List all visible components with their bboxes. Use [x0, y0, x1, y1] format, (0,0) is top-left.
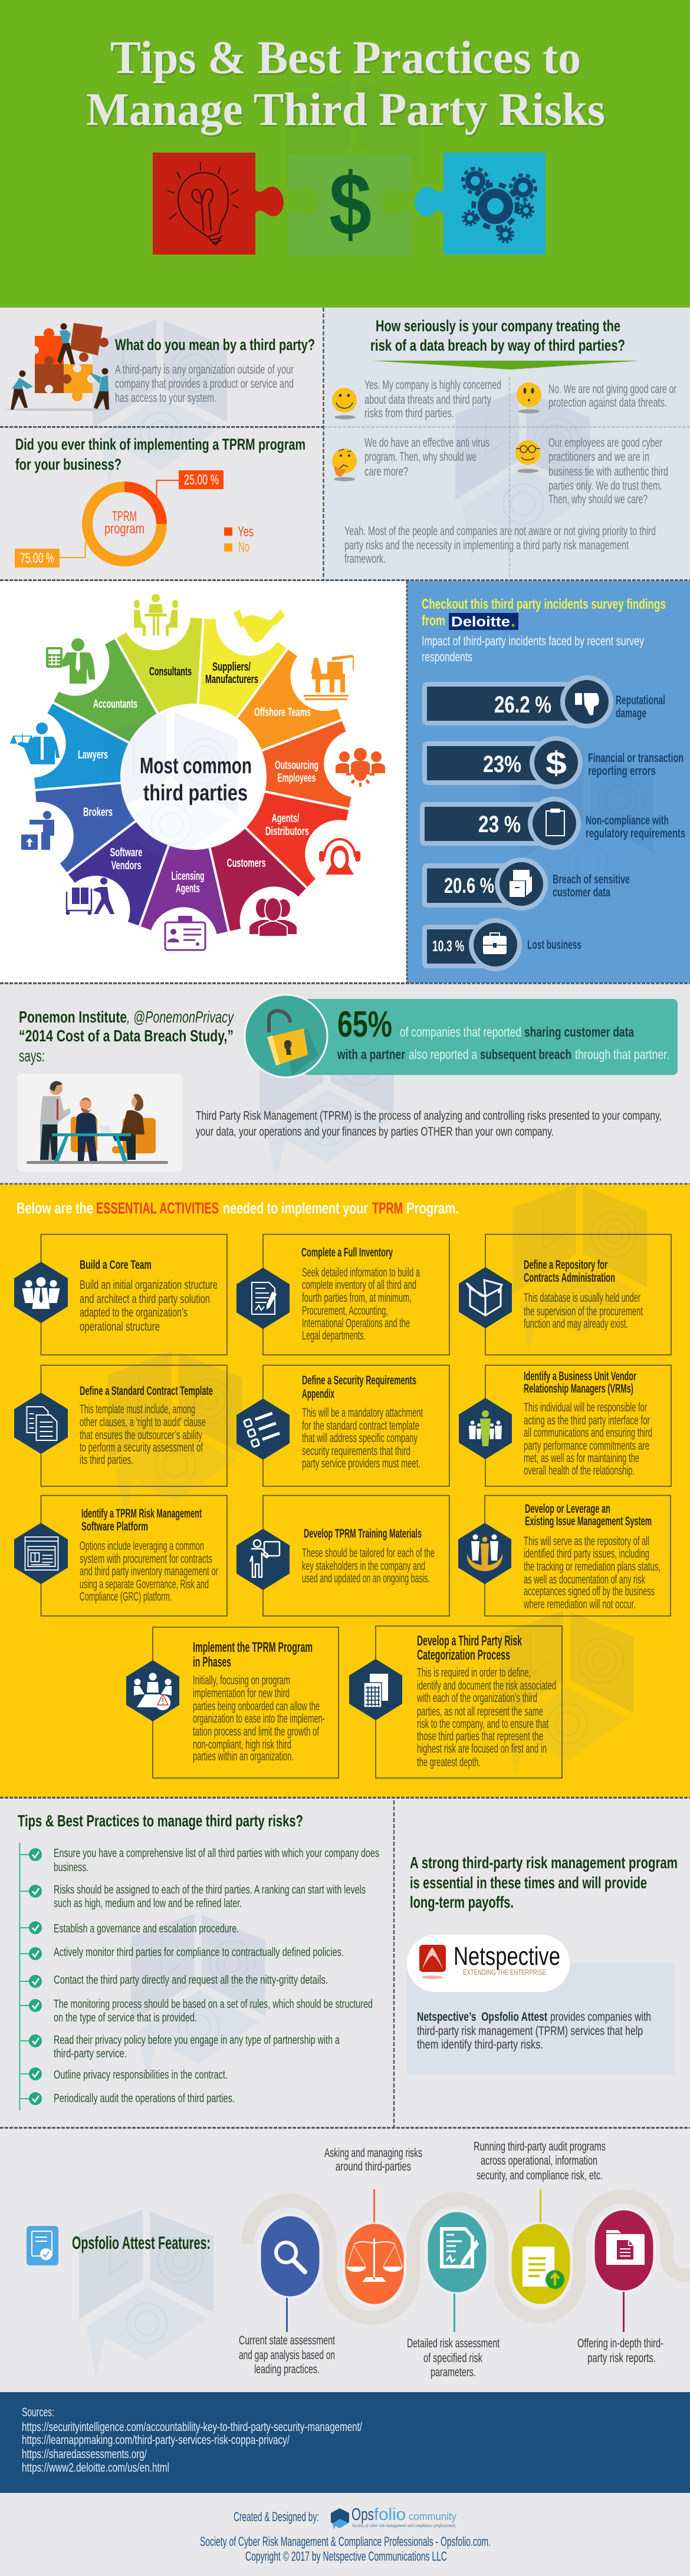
- icon: document upload: [523, 2247, 564, 2289]
- title: Manage Third Party Risks: [86, 84, 605, 136]
- logo: Netspective: EXTENDING THE ENTERPRISE: [463, 1968, 546, 1977]
- card: develop a third party risk categorization process: parties, as not all represent the same: [417, 1705, 543, 1719]
- segment labels: Outsourcing: [275, 759, 318, 772]
- icon: open box: [466, 1280, 502, 1315]
- card: define a security requirements appendix: [236, 1365, 449, 1486]
- text block: running audit programs: across operational, information: [481, 2154, 597, 2168]
- text block: asking and managing: Asking and managing risks: [324, 2146, 422, 2160]
- segment labels: Software: [110, 846, 143, 859]
- card: identify a TPRM risk management platform: Identify a TPRM Risk Management: [81, 1507, 202, 1520]
- illustration: business meeting: [17, 1074, 183, 1172]
- heading: strong program statement: long-term payoffs.: [410, 1893, 514, 1911]
- panel: sources: https://securityintelligence.com/accountability-key-to-third-party-security-management/: [22, 2420, 362, 2434]
- text block: yeah summary: framework.: [344, 552, 386, 566]
- icon: contract documents: [27, 1407, 57, 1440]
- text block: Ponemon citation: , @PonemonPrivacy: [127, 1008, 234, 1026]
- icon: meeting with warning: [134, 1673, 172, 1710]
- icon: core team: [22, 1277, 60, 1309]
- stat bar: customer data breach 20.6%: Breach of sensitive: [553, 873, 630, 886]
- text block: antivirus answer: We do have an effective anti virus: [364, 436, 489, 450]
- segment labels: Agents/: [271, 812, 300, 825]
- panel: third party definitions left: [0, 306, 690, 580]
- text block: tips list: Ensure you have a comprehensive list of all third parties with which your company does: [54, 1847, 379, 1860]
- card: define a security requirements appendix: for the standard contract template: [302, 1419, 419, 1433]
- stat bar: customer data breach 20.6%: customer data: [553, 886, 610, 899]
- callout: 65 percent: subsequent breach: [480, 1047, 571, 1062]
- card: build a core team: Build a Core Team: [80, 1258, 152, 1272]
- icon: smile face: [332, 388, 357, 420]
- icon: customers silhouettes: [249, 898, 297, 936]
- stat bar: reputational damage 26.2%: [422, 675, 665, 728]
- card: develop TPRM training materials: key stakeholders in the company and: [302, 1559, 425, 1573]
- text block: tips list: such as high, medium and low and be refined later.: [54, 1897, 242, 1910]
- panel: most common third parties wheel: [0, 581, 407, 983]
- donut chart: TPRM program: program: [104, 521, 144, 537]
- icon: magnifier: [276, 2242, 305, 2272]
- text block: yes answer: risks from third parties.: [364, 407, 454, 420]
- card: implement the TPRM program in phases: tation process and limit the growth of: [193, 1725, 319, 1739]
- chart legend: No: [238, 539, 249, 555]
- card: build a core team: operational structure: [80, 1320, 160, 1334]
- heading: strong program statement: [410, 1853, 678, 1911]
- title: Manage Third Party Risks: [87, 86, 606, 137]
- card: complete a full inventory: Complete a Full Inventory: [301, 1246, 393, 1259]
- text block: employees answer: [548, 436, 668, 506]
- text block: tips list: Establish a governance and escalation procedure.: [54, 1922, 239, 1935]
- icon: green puzzle piece with dollar sign: $: [329, 154, 372, 253]
- stat bar: non-compliance 23%: 23 %: [478, 812, 521, 837]
- panel: sources: https://sharedassessments.org/: [22, 2448, 147, 2461]
- logo: Netspective: [419, 1942, 560, 1979]
- text block: impact subtitle: respondents: [422, 649, 472, 664]
- icon: call agent: [319, 839, 360, 875]
- text block: offering reports: [577, 2337, 663, 2365]
- center label: third parties: [143, 781, 248, 806]
- text block: yeah summary: [344, 525, 656, 566]
- card: identify a TPRM risk management platform: and third party inventory management or: [80, 1565, 218, 1578]
- callout: 65 percent: also reported a: [409, 1047, 477, 1062]
- callout: Netspective: them identify third-party risks.: [417, 2038, 543, 2051]
- card: develop a third party risk categorization process: This is required in order to define,: [417, 1666, 531, 1680]
- card: define a security requirements appendix: security requirements that third: [302, 1444, 410, 1458]
- card: define a standard contract template: This template must include, among: [80, 1403, 195, 1416]
- card: implement the TPRM program in phases: parties being onboarded can allow the: [193, 1700, 320, 1713]
- stat bar: lost business 10.3%: 10.3 %: [432, 937, 464, 955]
- stat bar: customer data breach 20.6%: [422, 857, 630, 911]
- title: Tips & Best Practices to: [111, 34, 582, 85]
- center label: [140, 754, 252, 806]
- icon: outsourcing employees globe: [336, 748, 385, 787]
- card: develop a third party risk categorization process: identify and document the risk associated: [417, 1679, 556, 1693]
- segment labels: Brokers: [83, 806, 113, 819]
- callout: 65 percent: sharing customer data: [524, 1024, 634, 1040]
- text block: impact subtitle: [422, 634, 644, 664]
- text block: antivirus answer: program. Then, why should we: [364, 450, 477, 464]
- card: identify a TPRM risk management platform: Options include leveraging a common: [80, 1539, 204, 1553]
- heading: survey findings: [422, 596, 666, 630]
- card: define a security requirements appendix: that will address specific company: [302, 1432, 418, 1445]
- card: implement the TPRM program in phases: [126, 1627, 339, 1778]
- icon: offshore rig: [304, 655, 353, 700]
- segment labels: Suppliers/: [212, 661, 251, 674]
- card: define a repository: Define a Repository for: [524, 1258, 607, 1272]
- text block: tips list: on the type of service that is provided.: [54, 2011, 197, 2024]
- icon: certificate: [27, 2226, 58, 2265]
- segment labels: Vendors: [111, 859, 142, 872]
- icon: green puzzle piece with dollar sign: [288, 154, 412, 256]
- segment labels: Manufacturers: [205, 673, 258, 686]
- card: define a repository: Contracts Administration: [524, 1271, 615, 1285]
- logo: Opsfolio community: Ops: [351, 2505, 374, 2524]
- card: identify a business unit vendor: [459, 1365, 671, 1486]
- card: develop or leverage issue management: Develop or Leverage an: [525, 1502, 610, 1516]
- segment labels: Employees: [277, 772, 316, 785]
- card: define a security requirements appendix: Define a Security Requirements: [302, 1374, 416, 1387]
- heading: survey findings: from: [422, 613, 445, 629]
- icon: thumbs down: [575, 693, 599, 715]
- illustration: people assembling puzzle: [5, 323, 113, 411]
- card: define a repository: [459, 1234, 671, 1355]
- card: implement the TPRM program in phases: Implement the TPRM Program: [193, 1640, 313, 1655]
- panel: footer credits: Created & Designed by:: [234, 2509, 319, 2524]
- timeline: check markers: [19, 1843, 42, 2110]
- card: develop a third party risk categorization process: Develop a Third Party Risk: [417, 1633, 522, 1649]
- card: develop TPRM training materials: used and updated on an ongoing basis.: [302, 1572, 430, 1585]
- text block: third party definition: has access to your system.: [115, 391, 216, 405]
- heading: essential activities: TPRM: [372, 1199, 403, 1217]
- card: develop a third party risk categorization process: Categorization Process: [417, 1647, 510, 1663]
- panel: essential activities: [0, 1185, 690, 1797]
- donut chart: TPRM program: 25.00 %: [184, 472, 219, 488]
- icon: clipboard: [546, 809, 564, 836]
- segment labels: Distributors: [265, 825, 309, 838]
- text block: TPRM definition: your data, your operations and your finances by parties OTHER than your own company.: [196, 1125, 554, 1139]
- callout: 65 percent: of companies that reported: [400, 1024, 521, 1040]
- chart legend: [224, 524, 254, 555]
- icon: vendor team: [469, 1410, 502, 1446]
- card: define a security requirements appendix: party service providers must meet.: [302, 1457, 420, 1470]
- card: identify a TPRM risk management platform: system with procurement for contracts: [80, 1552, 212, 1566]
- card: define a security requirements appendix: This will be a mandatory attachment: [302, 1406, 423, 1420]
- text block: detailed risk assessment: [407, 2337, 500, 2379]
- card: identify a TPRM risk management platform: Software Platform: [81, 1520, 148, 1533]
- text block: tips list: The monitoring process should be based on a set of rules, which should be structured: [54, 1998, 373, 2011]
- card: implement the TPRM program in phases: parties within an organization.: [193, 1750, 294, 1763]
- text block: third party definition: [115, 363, 294, 405]
- chart: serpentine features path: [248, 2189, 690, 2332]
- icon: signed report: [440, 2227, 479, 2268]
- text block: Ponemon citation: “2014 Cost of a Data Breach Study,”: [19, 1027, 234, 1045]
- text block: yes answer: [364, 378, 501, 420]
- card: implement the TPRM program in phases: implementation for new third: [193, 1687, 290, 1700]
- wheel segments: [30, 614, 360, 943]
- heading: TPRM program question: for your business?: [15, 456, 121, 473]
- card: complete a full inventory: complete inventory of all third and: [302, 1278, 416, 1292]
- panel: Ponemon Institute statistic: [0, 984, 690, 1184]
- card: complete a full inventory: fourth parties from, at minimum,: [302, 1291, 412, 1305]
- donut chart: TPRM program: 75.00 %: [20, 550, 54, 566]
- stat bar: reputational damage 26.2%: Reputational: [616, 694, 665, 707]
- card: develop a third party risk categorization process: risk to the company, and to ensure that: [417, 1717, 548, 1731]
- card: develop a third party risk categorization process: highest risk are focused on first and in: [417, 1742, 547, 1756]
- panel: footer credits: Copyright © 2017 by Netspective Communications LLC: [245, 2549, 447, 2564]
- card: define a standard contract template: Define a Standard Contract Template: [80, 1384, 213, 1398]
- icon: trainer at board: [250, 1540, 280, 1577]
- icon: issue team: [467, 1535, 502, 1571]
- card: develop a third party risk categorization process: with each of the organization’s third: [416, 1691, 537, 1705]
- center label: Most common: [140, 754, 252, 779]
- heading: survey findings: Deloitte: [451, 614, 510, 630]
- icon: red puzzle piece with light bulb: [153, 153, 284, 255]
- heading: essential activities: needed to implement your: [223, 1199, 368, 1217]
- panel: tips and best practices: [0, 1799, 690, 2128]
- card: complete a full inventory: [236, 1234, 449, 1355]
- text block: running audit programs: Running third-party audit programs: [474, 2140, 606, 2153]
- segment labels: Accountants: [93, 698, 137, 711]
- text block: running audit programs: security, and compliance risk, etc.: [477, 2169, 603, 2182]
- card: define a standard contract template: to perform a security assessment of: [80, 1441, 203, 1454]
- text block: no answer: [548, 382, 676, 410]
- card: define a standard contract template: that ensures the outsourcer’s ability: [80, 1429, 202, 1442]
- icon: lawyer with scales: [11, 723, 60, 764]
- text block: detailed risk assessment: Detailed risk assessment: [407, 2337, 500, 2350]
- text block: current state assessment: Current state assessment: [239, 2334, 335, 2347]
- icon: consultants meeting: [134, 594, 178, 636]
- text block: tips list: Contact the third party directly and request all the the nitty-gritty details.: [54, 1974, 328, 1987]
- logo: Netspective: Netspective: [454, 1942, 560, 1971]
- text block: Ponemon citation: says:: [19, 1047, 45, 1065]
- panel: Opsfolio Attest features: [0, 2129, 690, 2392]
- chart legend: Yes: [238, 524, 254, 540]
- icon: risk reward scales: [346, 2238, 403, 2282]
- card: complete a full inventory: Legal departments.: [302, 1329, 366, 1343]
- card: identify a TPRM risk management platform: Compliance (GRC) platform.: [80, 1590, 172, 1604]
- callout: 65 percent: 65%: [337, 1004, 392, 1045]
- text block: running audit programs: [474, 2140, 606, 2182]
- callout: Netspective: provides companies with: [550, 2010, 651, 2024]
- text block: current state assessment: leading practices.: [254, 2363, 320, 2376]
- icon: licensing badge: [165, 916, 205, 950]
- icon: thinking face: [332, 448, 357, 481]
- heading: TPRM program question: Did you ever think of implementing a TPRM program: [15, 436, 305, 453]
- logo: Opsfolio community: folio: [374, 2505, 406, 2524]
- card: develop a third party risk categorization process: the greatest depth.: [417, 1756, 481, 1769]
- panel: sources: [0, 2392, 690, 2493]
- callout: Netspective: [407, 1935, 675, 2074]
- card: define a security requirements appendix: Appendix: [302, 1387, 334, 1401]
- segment labels: [78, 661, 318, 895]
- donut chart: TPRM program: [15, 470, 224, 568]
- text block: detailed risk assessment: parameters.: [431, 2366, 476, 2379]
- icon: blue puzzle piece with gears: [415, 153, 546, 255]
- icon: signed document: [252, 1282, 276, 1314]
- heading: essential activities: Below are the: [17, 1199, 93, 1217]
- callout: 65 percent: with a partner: [337, 1047, 405, 1062]
- icon: broker with parcel: [21, 811, 54, 850]
- icon: surprised face: [517, 382, 541, 414]
- text block: detailed risk assessment: of specified risk: [423, 2351, 482, 2365]
- arrow: green down triangle: [373, 361, 640, 370]
- title: Tips & Best Practices to: [110, 32, 581, 84]
- stat bar: financial errors 23%: [422, 736, 684, 789]
- stat bar: reputational damage 26.2%: 26.2 %: [494, 692, 551, 718]
- card: build a core team: and architect a third party solution: [80, 1292, 210, 1306]
- card: develop a third party risk categorization process: those third parties that represent the: [417, 1730, 543, 1743]
- text block: employees answer: practitioners and we are in: [548, 450, 649, 464]
- card: build a core team: adapted to the organization’s: [80, 1306, 188, 1320]
- stat bar: financial errors 23%: reporting errors: [588, 764, 656, 778]
- icon: accountant: [46, 638, 95, 684]
- card: develop a third party risk categorization process: [349, 1626, 562, 1778]
- heading: attest features: Opsfolio Attest Features:: [72, 2232, 211, 2253]
- stat bar: non-compliance 23%: [420, 797, 685, 850]
- text block: yes answer: about data threats and third party: [364, 393, 491, 407]
- card: complete a full inventory: Procurement, Accounting,: [302, 1304, 388, 1318]
- card: complete a full inventory: International Operations and the: [302, 1317, 410, 1330]
- heading: essential activities: ESSENTIAL ACTIVITIES: [96, 1199, 219, 1217]
- text block: tips list: Read their privacy policy before you engage in any type of partnership with a: [54, 2034, 340, 2047]
- panel: sources: Sources:: [22, 2406, 54, 2419]
- callout: 65 percent: [245, 995, 678, 1077]
- title: [86, 32, 606, 137]
- card: build a core team: [14, 1234, 227, 1355]
- icon: calendars: [364, 1674, 388, 1707]
- text block: current state assessment: and gap analysis based on: [239, 2349, 335, 2362]
- text block: tips list: business.: [54, 1861, 88, 1874]
- card: implement the TPRM program in phases: in Phases: [193, 1654, 231, 1670]
- text block: tips list: Risks should be assigned to each of the third parties. A ranking can start with levels: [54, 1884, 366, 1896]
- text block: tips list: third-party service.: [54, 2047, 127, 2060]
- stat bar: customer data breach 20.6%: 20.6 %: [444, 873, 494, 898]
- card: define a standard contract template: [14, 1365, 227, 1486]
- heading: tips: Tips & Best Practices to manage third party risks?: [18, 1812, 303, 1830]
- card: build a core team: Build an initial organization structure: [80, 1278, 218, 1292]
- icon: file drawer: [510, 870, 532, 897]
- segment labels: Lawyers: [78, 748, 108, 761]
- callout: Netspective: Netspective’s Opsfolio Attest: [417, 2010, 547, 2024]
- heading: TPRM program question: [15, 436, 305, 473]
- text block: offering reports: party risk reports.: [587, 2351, 656, 2365]
- text block: asking and managing: [324, 2146, 422, 2173]
- logo: Opsfolio community: Society of cyber risk management and compliance professionals: [352, 2523, 455, 2528]
- heading: how seriously: [370, 317, 625, 354]
- icon: glasses face: [515, 440, 540, 473]
- card: develop TPRM training materials: [236, 1496, 449, 1616]
- segment labels: Offshore Teams: [254, 706, 311, 719]
- icon: software vendor delivery: [66, 878, 114, 915]
- icon: checklist: [244, 1411, 281, 1447]
- card: define a standard contract template: its third parties.: [80, 1453, 133, 1467]
- text block: antivirus answer: [364, 436, 489, 479]
- heading: essential activities: [17, 1199, 459, 1217]
- card: implement the TPRM program in phases: non-compliant, high risk third: [193, 1738, 291, 1752]
- text block: tips list: [54, 1847, 379, 2105]
- card: define a standard contract template: other clauses, a ‘right to audit’ clause: [80, 1416, 206, 1429]
- panel: footer credits: Society of Cyber Risk Management & Compliance Professionals - Opsfolio.com.: [200, 2534, 491, 2549]
- heading: essential activities: Program.: [406, 1199, 459, 1217]
- text block: third party definition: company that provides a product or service and: [115, 377, 294, 391]
- logo: Opsfolio community: [331, 2505, 456, 2529]
- icon: report folder: [606, 2230, 645, 2265]
- segment labels: Consultants: [149, 665, 192, 678]
- card: develop TPRM training materials: These should be tailored for each of the: [302, 1546, 435, 1560]
- text block: current state assessment: [239, 2334, 335, 2376]
- stat bar: reputational damage 26.2%: damage: [616, 707, 646, 720]
- card: develop TPRM training materials: Develop TPRM Training Materials: [304, 1527, 422, 1541]
- panel: sources: https://www2.deloitte.com/us/en.html: [22, 2461, 169, 2475]
- icon: open padlock: [245, 995, 327, 1077]
- donut chart: TPRM program: TPRM: [112, 509, 137, 525]
- panel: how seriously right: [324, 308, 690, 580]
- segment labels: Agents: [176, 882, 200, 895]
- text block: TPRM definition: [196, 1109, 662, 1139]
- icon: dollar: $: [546, 746, 567, 781]
- segment labels: Licensing: [171, 870, 204, 883]
- text block: tips list: Periodically audit the operations of third parties.: [54, 2092, 235, 2105]
- panel: Deloitte survey findings: [407, 581, 690, 983]
- text block: tips list: Outline privacy responsibilities in the contract.: [54, 2069, 228, 2082]
- hero banner: [0, 0, 690, 306]
- stat bar: lost business 10.3%: Lost business: [527, 938, 581, 952]
- text block: tips list: Actively monitor third parties for compliance to contractually defined policies.: [54, 1946, 344, 1959]
- card: define a repository: function and may already exist.: [524, 1317, 628, 1331]
- segment labels: Customers: [227, 857, 266, 870]
- text block: Ponemon citation: Ponemon Institute: [19, 1008, 127, 1026]
- logo: Opsfolio community: community: [409, 2511, 456, 2522]
- icon: handshake: [234, 609, 285, 643]
- card: identify a TPRM risk management platform: using a separate Governance, Risk and: [80, 1578, 209, 1591]
- panel: sources: https://learnappmaking.com/third-party-services-risk-coppa-privacy/: [22, 2433, 290, 2447]
- heading: what do you mean: What do you mean by a third party?: [115, 336, 315, 354]
- stat bar: financial errors 23%: 23%: [483, 751, 521, 777]
- text block: third party definition: A third-party is any organization outside of your: [115, 363, 294, 377]
- card: implement the TPRM program in phases: organization to ease into the implemen-: [193, 1712, 325, 1726]
- text block: Ponemon citation: [19, 1008, 234, 1065]
- card: complete a full inventory: Seek detailed information to build a: [302, 1266, 420, 1279]
- card: identify a TPRM risk management platform: [14, 1496, 227, 1616]
- text block: antivirus answer: care more?: [364, 465, 408, 479]
- stat bar: lost business 10.3%: [422, 918, 581, 971]
- card: develop or leverage issue management: [458, 1496, 671, 1616]
- text block: yes answer: Yes. My company is highly concerned: [364, 378, 501, 392]
- text block: asking and managing: around third-parties: [336, 2160, 411, 2173]
- icon: briefcase: [483, 933, 507, 954]
- icon: software window: [25, 1537, 58, 1570]
- panel: footer credits: [0, 2493, 690, 2576]
- card: implement the TPRM program in phases: Initially, focusing on program: [193, 1674, 290, 1687]
